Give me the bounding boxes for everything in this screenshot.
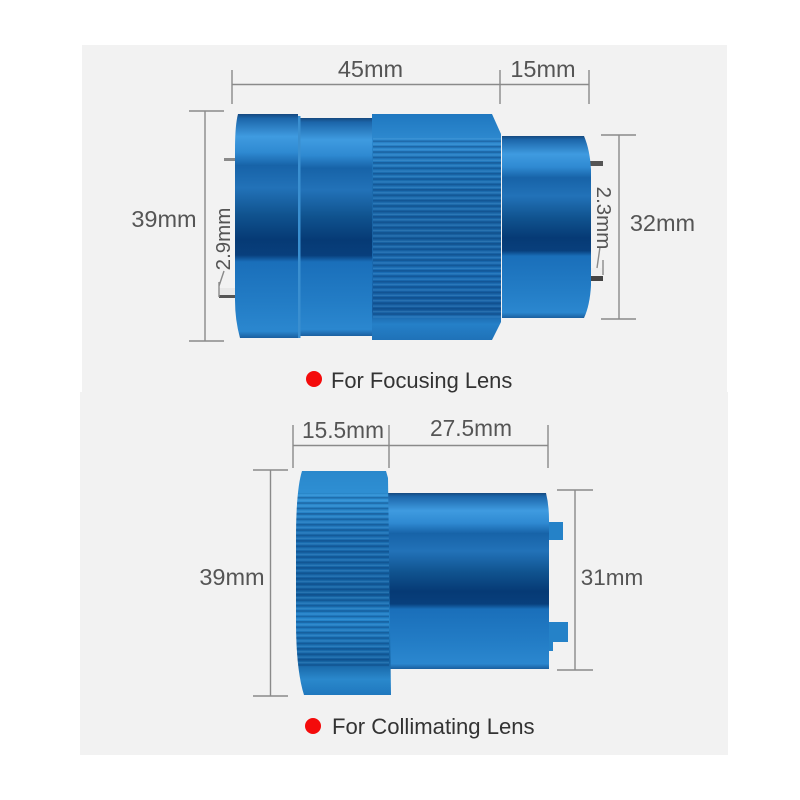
caption: for focusing lens: For Focusing Lens [331,368,512,393]
dimension: 15mm [500,56,589,104]
dimension: 27.5mm: 27.5mm [430,415,512,441]
dimension: 2.9mm: 2.9mm [212,208,235,270]
dimension: 31mm: 31mm [581,565,643,590]
dimension: 45mm: 45mm [338,56,403,82]
dimension: 31mm [557,490,643,670]
dimension: 15mm: 15mm [510,56,576,82]
dimension: 39mm focusing [131,111,224,341]
focusing lens holder [219,114,603,340]
panel: collimating lens background [80,392,728,755]
dimension: 39mm collimating [199,470,288,696]
dimension: 39mm focusing: 39mm [131,206,197,232]
dimension: 2.3mm: 2.3mm [592,187,615,249]
dimension: 39mm collimating: 39mm [199,564,265,590]
panel: focusing lens background [82,45,727,393]
caption: for collimating lens: For Collimating Lens [332,714,535,739]
dimension: 45mm [232,56,500,104]
infographic: lens holder dimensions [80,45,728,755]
dimension: 32mm: 32mm [630,210,695,236]
dimension: 15.5mm: 15.5mm [302,417,384,443]
collimating lens holder [296,471,568,695]
dimension: 27.5mm [389,415,548,468]
dimension: 15.5mm [293,417,389,468]
dimension: 32mm [601,135,695,319]
